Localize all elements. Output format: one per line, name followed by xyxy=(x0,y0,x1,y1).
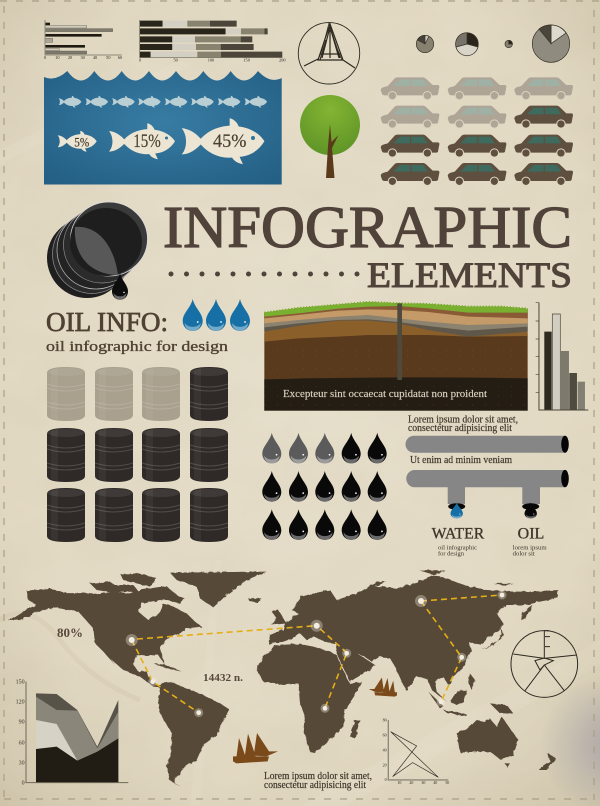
horizontal bar chart: small: 0 xyxy=(44,55,46,60)
label: oil: dolor sit xyxy=(513,552,535,558)
xy line chart: 50 xyxy=(445,780,449,785)
title xyxy=(163,194,572,295)
soil cross-section panel xyxy=(264,302,528,411)
area chart xyxy=(16,680,128,787)
water with waves xyxy=(44,71,282,184)
horizontal bar chart: small: 10 xyxy=(55,55,59,60)
fish 15%: 15% xyxy=(133,131,161,152)
label: oil: OIL xyxy=(518,525,544,542)
area chart: 0 xyxy=(22,781,25,787)
area chart: 30 xyxy=(19,761,25,767)
xy line chart: 40 xyxy=(383,748,387,753)
radar chart: top xyxy=(298,23,360,84)
stacked bar chart: large: 150 xyxy=(243,58,250,63)
fish 45% xyxy=(182,118,264,164)
oil drop pictogram grid xyxy=(262,433,387,540)
area chart: 60 xyxy=(19,740,25,746)
label: 80%: 80% xyxy=(57,625,83,640)
xy line chart: 0 xyxy=(385,777,387,782)
radar chart: lower right xyxy=(511,631,578,697)
pipe diagram text xyxy=(408,414,518,466)
area chart: 90 xyxy=(19,720,25,726)
heading: oil info: OIL INFO: xyxy=(46,307,168,337)
pie chart 2 xyxy=(456,33,478,56)
horizontal bar chart: small: 50 xyxy=(106,55,110,60)
label: water: WATER xyxy=(432,525,485,542)
fish 45%: 45% xyxy=(213,131,247,152)
car pictogram grid xyxy=(381,77,573,186)
pipes xyxy=(406,436,569,518)
world map xyxy=(8,571,558,787)
icon: ship left xyxy=(233,733,278,763)
pie chart 1 xyxy=(416,35,434,53)
fish panel xyxy=(44,71,282,184)
vertical bar chart xyxy=(536,303,588,410)
xy line chart: 80 xyxy=(383,718,387,723)
horizontal bar chart: small: 30 xyxy=(80,55,85,60)
stacked bar chart: large: 100 xyxy=(208,58,214,63)
title: INFOGRAPHIC xyxy=(163,194,572,260)
routes xyxy=(126,590,506,717)
area chart: 120 xyxy=(16,700,25,706)
xy line chart: 30 xyxy=(421,780,425,785)
horizontal bar chart: small: 20 xyxy=(68,55,72,60)
xy line chart: 10 xyxy=(397,780,401,785)
horizontal bar chart: small: 40 xyxy=(93,55,97,60)
label: oil xyxy=(513,525,547,558)
title: ELEMENTS xyxy=(367,255,572,295)
horizontal bar chart: small: 60 xyxy=(118,55,122,60)
pipe diagram text: Lorem ipsum dolor sit amet, xyxy=(408,414,518,426)
barrel pictogram grid xyxy=(47,367,228,542)
upper pipe xyxy=(406,436,569,453)
xy line chart: 20 xyxy=(383,763,387,768)
fish 5%: 5% xyxy=(74,134,89,150)
horizontal bar chart: small xyxy=(44,20,122,60)
fish 5% xyxy=(58,131,97,152)
pie chart 4 xyxy=(532,25,570,62)
pie charts xyxy=(416,25,570,62)
americas and arctic xyxy=(8,572,267,787)
eurasia, africa and oceania xyxy=(257,571,558,770)
stacked bar chart: large: 50 xyxy=(173,58,178,63)
bottom text xyxy=(264,771,372,791)
pie chart 3 xyxy=(505,40,512,48)
small fish row xyxy=(59,96,267,108)
icon: three water drops xyxy=(183,299,250,331)
label: water: for design xyxy=(438,550,464,558)
icon: tipped oil barrel xyxy=(47,202,148,300)
area chart: 150 xyxy=(16,680,25,686)
label: water: oil infographic xyxy=(438,544,477,552)
icon: tree xyxy=(300,95,360,178)
xy line chart: 60 xyxy=(383,733,387,738)
heading: oil info: oil infographic for design xyxy=(46,339,229,355)
icon: ship right xyxy=(369,678,397,697)
label: 14432 n.: 14432 n. xyxy=(203,673,244,684)
xy line chart xyxy=(383,718,449,785)
xy line chart: 40 xyxy=(433,780,437,785)
fish 15% xyxy=(109,123,175,159)
xy line chart: 20 xyxy=(409,780,413,785)
label: oil: lorem ipsum xyxy=(513,546,547,552)
heading: oil info xyxy=(46,307,229,355)
pipe diagram text: consectetur adipisicing elit xyxy=(408,423,512,434)
stacked bar chart: large xyxy=(139,20,286,63)
stacked bar chart: large: 0 xyxy=(139,58,141,63)
caption: Excepteur sint occaecat cupidatat non proident xyxy=(283,388,487,400)
bottom text: consectetur adipisicing elit xyxy=(264,780,366,791)
lower pipe with outlets xyxy=(406,470,569,518)
stacked bar chart: large: 200 xyxy=(279,58,286,63)
pipe diagram text: Ut enim ad minim veniam xyxy=(410,455,512,466)
bottom text: Lorem ipsum dolor sit amet, xyxy=(264,771,372,782)
label: water xyxy=(432,525,485,558)
